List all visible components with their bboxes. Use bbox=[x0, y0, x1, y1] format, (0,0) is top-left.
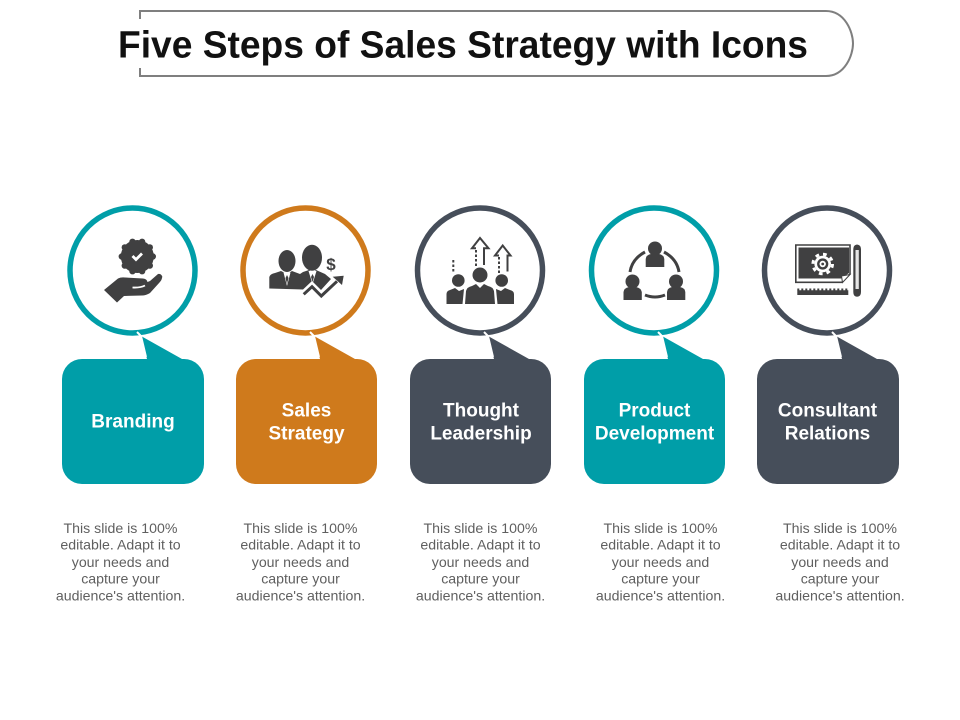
ring bbox=[70, 208, 195, 333]
description bbox=[416, 520, 545, 604]
description: editable. Adapt it to bbox=[780, 536, 900, 552]
panel: Consultant Relations bbox=[757, 208, 905, 604]
panel: Thought Leadership bbox=[410, 208, 551, 604]
ring bbox=[764, 208, 890, 333]
description: This slide is 100% bbox=[64, 520, 178, 536]
description: editable. Adapt it to bbox=[240, 536, 361, 552]
description: capture your bbox=[441, 570, 520, 586]
description: editable. Adapt it to bbox=[600, 536, 721, 552]
description: capture your bbox=[81, 570, 160, 586]
description: capture your bbox=[261, 570, 340, 586]
description: your needs and bbox=[252, 554, 349, 570]
speech box bbox=[62, 336, 204, 484]
description: This slide is 100% bbox=[604, 520, 718, 536]
icon: blueprint, gear, ruler and pencil bbox=[796, 244, 861, 297]
ring bbox=[418, 208, 542, 333]
panel: Thought Leadership: Leadership bbox=[430, 424, 532, 444]
label: Thought bbox=[443, 400, 520, 422]
description: audience's attention. bbox=[775, 588, 905, 604]
tail gap bbox=[310, 332, 319, 357]
tail gap bbox=[658, 332, 667, 357]
icon: businessmen with growth chart bbox=[269, 245, 344, 296]
panel: Sales Strategy bbox=[236, 208, 377, 604]
tail gap bbox=[137, 332, 146, 357]
speech box bbox=[236, 336, 377, 484]
title banner outline bbox=[140, 11, 853, 76]
description: This slide is 100% bbox=[783, 520, 897, 536]
description bbox=[56, 520, 185, 604]
panel: Sales Strategy: Strategy bbox=[268, 424, 345, 444]
label: Product bbox=[619, 400, 691, 422]
description: your needs and bbox=[72, 554, 169, 570]
description: This slide is 100% bbox=[244, 520, 358, 536]
icon: team with rising arrows bbox=[446, 238, 514, 304]
description: editable. Adapt it to bbox=[60, 536, 181, 552]
speech box bbox=[584, 336, 725, 484]
description bbox=[775, 520, 905, 604]
description bbox=[596, 520, 725, 604]
description: This slide is 100% bbox=[424, 520, 538, 536]
description: audience's attention. bbox=[596, 588, 725, 604]
description: capture your bbox=[621, 570, 700, 586]
description: your needs and bbox=[612, 554, 709, 570]
description: editable. Adapt it to bbox=[420, 536, 541, 552]
description: audience's attention. bbox=[416, 588, 545, 604]
label: Branding bbox=[91, 412, 175, 432]
speech box bbox=[410, 336, 551, 484]
icon: badge in hand bbox=[104, 239, 162, 302]
description: your needs and bbox=[791, 554, 889, 570]
description: your needs and bbox=[432, 554, 529, 570]
tail gap bbox=[832, 332, 841, 357]
icon: three people in a cycle bbox=[624, 242, 685, 300]
speech box bbox=[757, 336, 899, 484]
label: Consultant bbox=[778, 400, 878, 422]
description: capture your bbox=[801, 570, 880, 586]
ring bbox=[592, 208, 716, 333]
panel: Product Development: Development bbox=[595, 424, 715, 444]
panel: Consultant Relations: Relations bbox=[785, 424, 870, 444]
panel: Branding bbox=[56, 208, 204, 604]
description bbox=[236, 520, 365, 604]
icon: businessmen with growth chart: $ bbox=[326, 255, 336, 274]
ring bbox=[243, 208, 368, 333]
title: Five Steps of Sales Strategy with Icons bbox=[118, 24, 808, 66]
panel: Product Development bbox=[584, 208, 725, 604]
tail gap bbox=[484, 332, 493, 357]
description: audience's attention. bbox=[236, 588, 365, 604]
description: audience's attention. bbox=[56, 588, 185, 604]
label: Sales bbox=[282, 400, 331, 422]
